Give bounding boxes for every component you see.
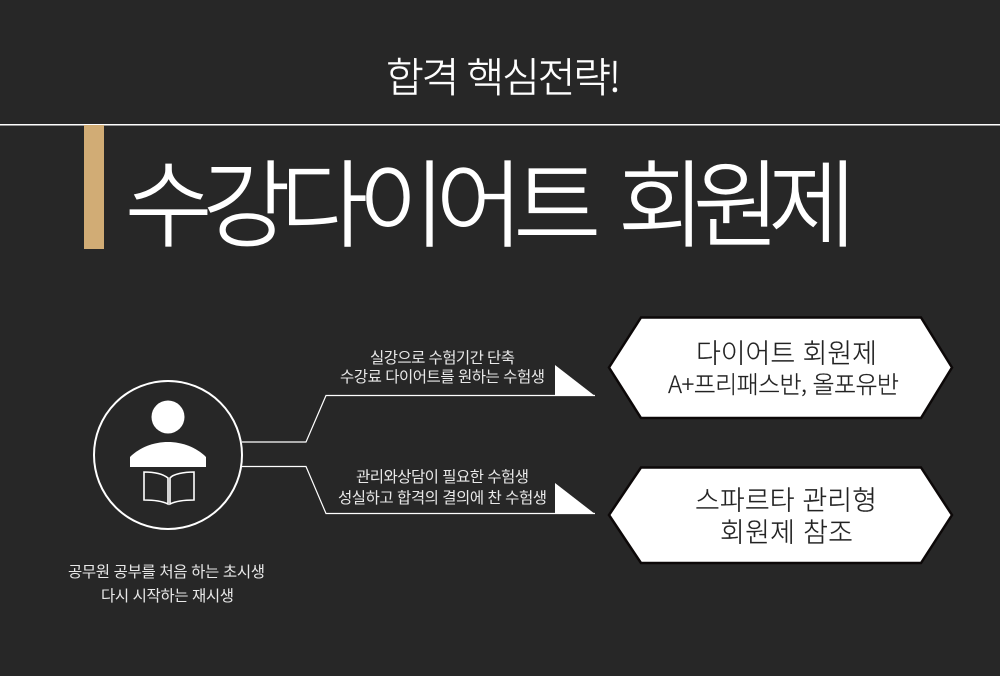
text: lower description: 성실하고 합격의 결의에 찬 수험생 <box>338 486 547 508</box>
icon: student reading a book <box>94 381 242 529</box>
hexagon: diet membership: 다이어트 회원제 <box>696 332 877 371</box>
hexagon: sparta membership <box>609 468 952 563</box>
text: target audience <box>68 560 265 606</box>
title: 회원제 <box>618 130 856 267</box>
connector: lower arrow <box>242 466 595 514</box>
hexagon: diet membership: A+프리패스반, 올포유반 <box>668 365 899 400</box>
title: 수강다이어트 <box>125 130 601 267</box>
text: upper description: 실강으로 수험기간 단축 <box>370 346 515 368</box>
hexagon: sparta membership: 회원제 참조 <box>720 511 853 550</box>
text: target audience: 다시 시작하는 재시생 <box>101 584 234 606</box>
connector: upper arrow <box>242 365 595 442</box>
text: target audience: 공무원 공부를 처음 하는 초시생 <box>68 560 265 582</box>
title <box>125 130 856 267</box>
text: upper description <box>340 346 545 387</box>
heading: subtitle: 합격 핵심전략! <box>386 44 621 104</box>
hexagon: sparta membership: 스파르타 관리형 <box>695 479 877 518</box>
accent bar <box>84 125 104 249</box>
hexagon: diet membership <box>609 318 952 418</box>
text: lower description <box>338 465 547 508</box>
text: upper description: 수강료 다이어트를 원하는 수험생 <box>340 365 545 387</box>
text: lower description: 관리와상담이 필요한 수험생 <box>356 465 529 487</box>
